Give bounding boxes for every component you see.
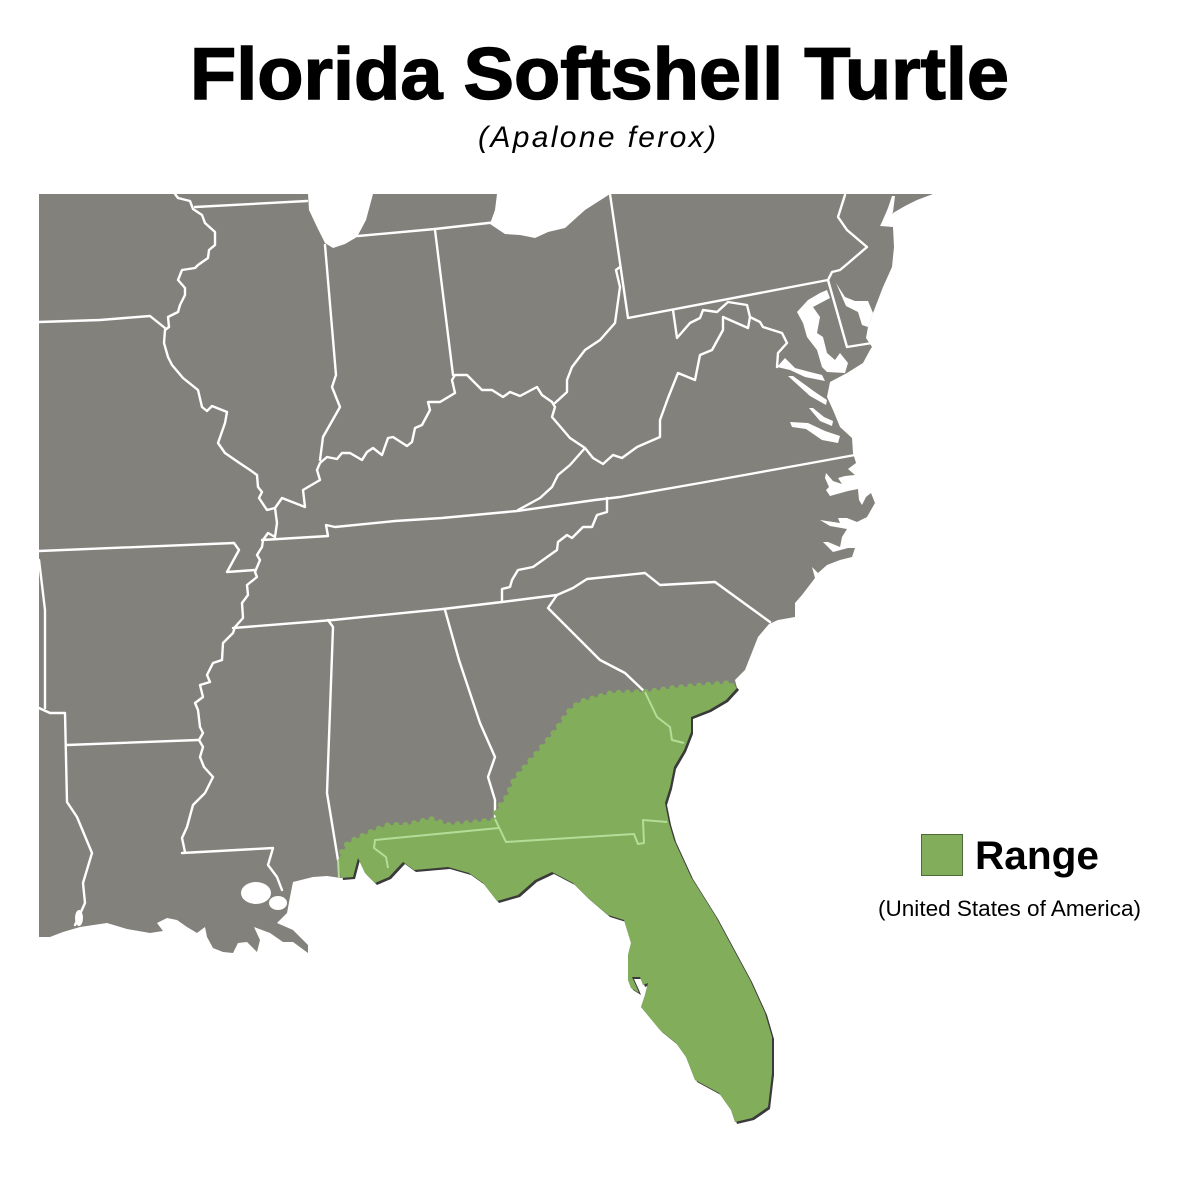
range area — [338, 683, 772, 1122]
legend label: Range — [975, 834, 1099, 878]
range shadow — [340, 685, 774, 1124]
legend note: (United States of America) — [878, 896, 1141, 921]
range: Florida softshell turtle distribution — [338, 683, 774, 1124]
state borders inside range — [338, 692, 684, 878]
land mass — [39, 194, 933, 1122]
map: southeastern United States — [39, 194, 933, 1124]
title: Florida Softshell Turtle — [190, 34, 1009, 115]
subtitle: scientific name: (Apalone ferox) — [478, 121, 716, 154]
legend — [878, 834, 1141, 921]
white water: lakes and bays — [75, 196, 895, 942]
state borders — [39, 194, 872, 925]
legend swatch — [922, 834, 962, 876]
